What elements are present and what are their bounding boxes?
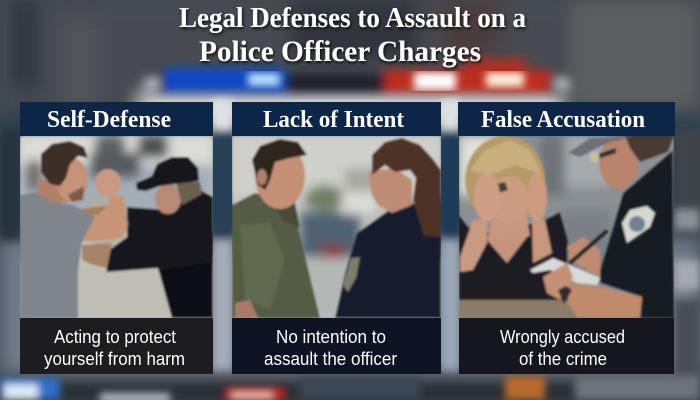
- light bar: [150, 74, 570, 92]
- man: [80, 206, 108, 216]
- caption: lack of intent: [232, 318, 441, 374]
- title: [179, 2, 526, 68]
- caption: lack of intent: assault the officer: [264, 349, 397, 369]
- heading: false accusation: False Accusation: [481, 107, 645, 133]
- caption: self-defense: Acting to protect: [54, 327, 176, 347]
- caption: false accusation: of the crime: [519, 349, 607, 369]
- title: Legal Defenses to Assault on a: [179, 2, 526, 34]
- gaps between panels: [213, 100, 232, 130]
- photo: woman with officer taking notes: [459, 136, 674, 318]
- man: [232, 193, 320, 318]
- caption: self-defense: yourself from harm: [44, 349, 185, 369]
- heading: lack of intent: Lack of Intent: [263, 107, 404, 133]
- hands, notepad, pen: [567, 283, 642, 318]
- table: [459, 300, 584, 318]
- officer: [600, 150, 674, 318]
- heading: self-defense: Self-Defense: [47, 107, 171, 133]
- officer: [335, 202, 441, 318]
- photo: man blocking officer: [20, 136, 213, 318]
- caption: false accusation: [459, 318, 674, 374]
- officer: [105, 190, 213, 318]
- badge: [622, 206, 655, 243]
- panel: false accusation: [458, 102, 675, 374]
- heading: lack of intent: [232, 102, 441, 136]
- caption: self-defense: [20, 318, 213, 374]
- caption: lack of intent: No intention to: [276, 327, 386, 347]
- panel: self-defense: [20, 102, 213, 374]
- bottom strip: [0, 378, 60, 400]
- panel: lack of intent: [232, 102, 441, 374]
- heading: false accusation: [458, 102, 675, 136]
- woman: [459, 212, 570, 305]
- title: Police Officer Charges: [199, 35, 481, 68]
- photo: man talking with female officer: [232, 136, 441, 318]
- heading: self-defense: [20, 102, 213, 136]
- caption: false accusation: Wrongly accused: [500, 327, 625, 347]
